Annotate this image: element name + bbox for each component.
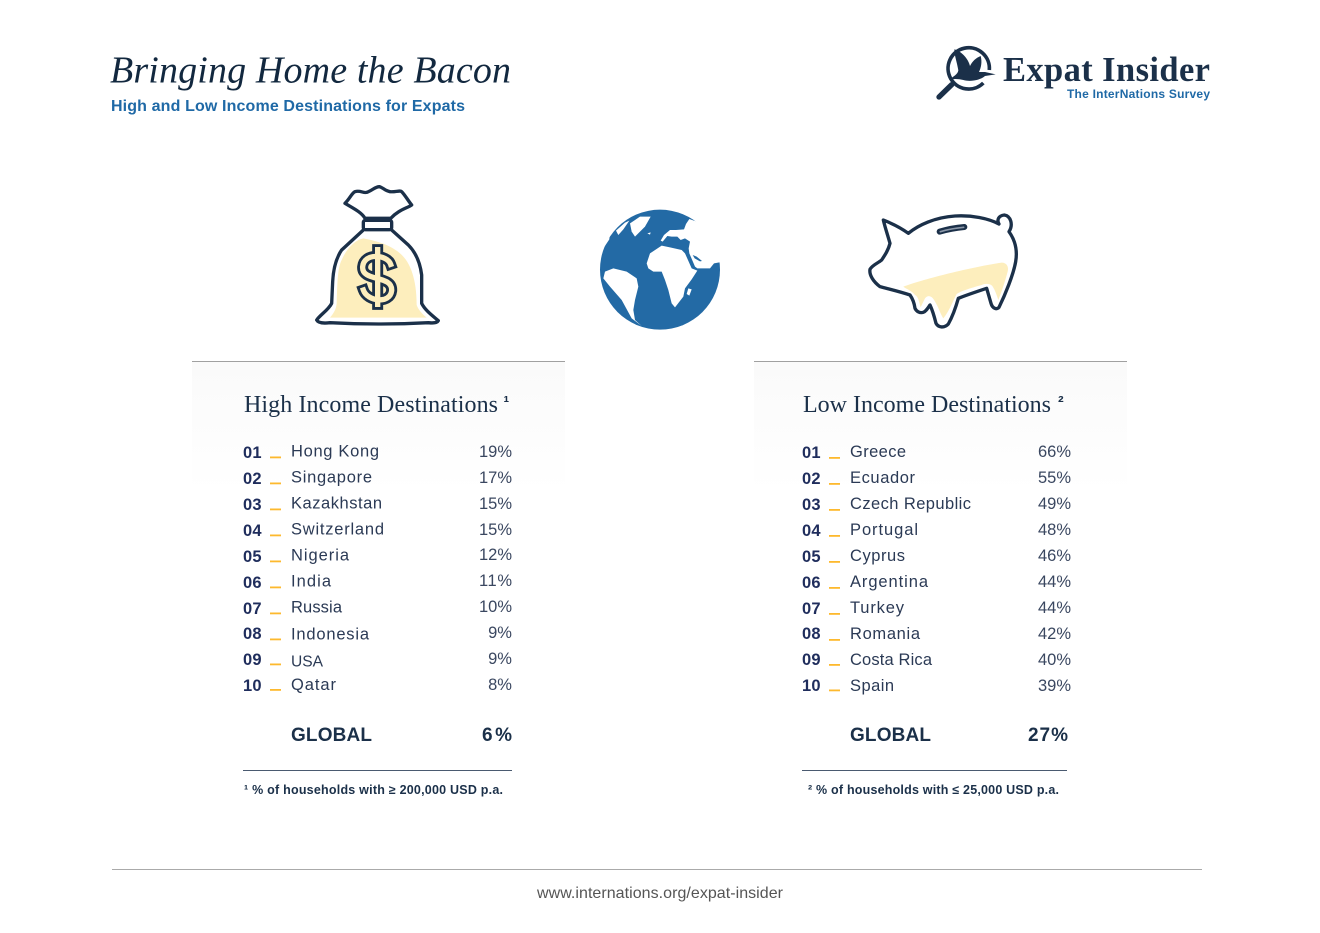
row 03 [243,494,512,514]
row 09: 9% [488,650,512,668]
row 03: Czech Republic [850,495,971,513]
row 05: Cyprus [850,547,905,565]
footer url: www.internations.org/expat-insider [536,885,784,902]
icon: magnifying glass with bird [939,48,996,97]
global row: GLOBAL [291,725,372,746]
row 05 [802,547,1071,566]
row 07: Turkey [850,599,905,617]
row 07 [802,599,1071,618]
row 06: Argentina [850,573,929,591]
row 08: 08 [802,625,820,643]
global row [850,725,1068,746]
row 04: 15% [479,521,512,539]
row 06: 06 [802,574,820,592]
row 04 [243,520,512,540]
row 04: Portugal [850,521,918,539]
row 04: Switzerland [291,520,384,538]
row 05 [243,546,512,566]
row 09 [802,651,1071,669]
row 01: Greece [850,443,906,461]
row 02: Singapore [291,468,372,486]
row 03 [802,495,1071,514]
row 04: 04 [243,522,262,540]
logo: Expat Insider [939,48,1210,101]
row 08: Indonesia [291,626,370,644]
row 03: 03 [802,496,820,514]
row 04: 04 [802,522,821,540]
row 04 [802,521,1071,540]
title: Bringing Home the Bacon [110,50,511,92]
row 09: 09 [802,651,820,669]
row 02: 02 [243,470,262,488]
icon: piggy bank [870,215,1016,327]
logo tagline: The InterNations Survey [1067,87,1210,101]
row 01: 66% [1038,443,1071,461]
row 07: Russia [291,598,343,616]
row 06: 11% [479,572,512,590]
panel: high income destinations [192,361,565,797]
Persian Gulf [693,255,702,261]
row 09: Costa Rica [850,651,933,669]
row 06: India [291,572,332,590]
global row: 27% [1028,725,1068,746]
global row [291,725,512,746]
row 01: 01 [243,444,262,462]
row 02 [243,468,512,488]
row 05: 05 [802,548,820,566]
global row: 6% [482,725,512,746]
footnote marker 2: ² [1058,393,1064,412]
row 10 [802,677,1071,695]
row 03: 15% [479,495,512,513]
row 08: Romania [850,625,921,643]
row 09: USA [291,654,324,670]
row 09 [243,650,512,670]
row 07: 07 [802,600,820,618]
row 03: Kazakhstan [291,494,382,512]
heading: high income: High Income Destinations [244,392,498,418]
row 02: Ecuador [850,469,916,487]
icon: money bag [317,187,438,324]
row 10 [243,676,512,695]
row 08: 08 [243,625,262,643]
row 09: 40% [1038,651,1071,669]
row 10: 8% [488,676,512,694]
icon: globe [590,200,730,330]
row 01 [802,443,1071,462]
row 08: 9% [488,624,512,642]
row 05: Nigeria [291,546,350,564]
row 02: 02 [802,470,820,488]
row 07: 07 [243,600,262,618]
row 04: 48% [1038,521,1071,539]
row 02: 55% [1038,469,1071,487]
row 03: 49% [1038,495,1071,513]
row 09: 09 [243,651,262,669]
row 06 [802,573,1071,592]
row 03: 03 [243,496,262,514]
row 01 [243,442,512,462]
row 10: Qatar [291,676,336,694]
subtitle: High and Low Income Destinations for Expats [111,98,465,115]
row 06: 44% [1038,573,1071,591]
row 02: 17% [479,469,512,487]
row 01: 19% [479,443,512,461]
row 08: 42% [1038,625,1071,643]
logo wordmark: Expat Insider [1003,51,1210,89]
footnote marker 1: ¹ [504,393,510,412]
row 05: 12% [479,546,512,564]
row 01: Hong Kong [291,442,379,460]
row 06: 06 [243,574,262,592]
row 05: 05 [243,548,262,566]
row 07: 10% [479,598,512,616]
row 06 [243,572,512,592]
row 10: 39% [1038,677,1071,695]
row 10: 10 [243,677,262,695]
row 07 [243,598,512,618]
panel: low income destinations [754,361,1127,797]
global row: GLOBAL [850,725,931,746]
row 10: Spain [850,677,894,695]
row 08 [802,625,1071,643]
row 01: 01 [802,444,820,462]
footnote 2: ² % of households with ≤ 25,000 USD p.a. [808,783,1059,797]
row 10: 10 [802,677,820,695]
row 02 [802,469,1071,488]
heading: low income: Low Income Destinations [803,392,1051,418]
row 05: 46% [1038,547,1071,565]
row 08 [243,624,512,644]
row 07: 44% [1038,599,1071,617]
footnote 1: ¹ % of households with ≥ 200,000 USD p.a. [244,783,503,797]
